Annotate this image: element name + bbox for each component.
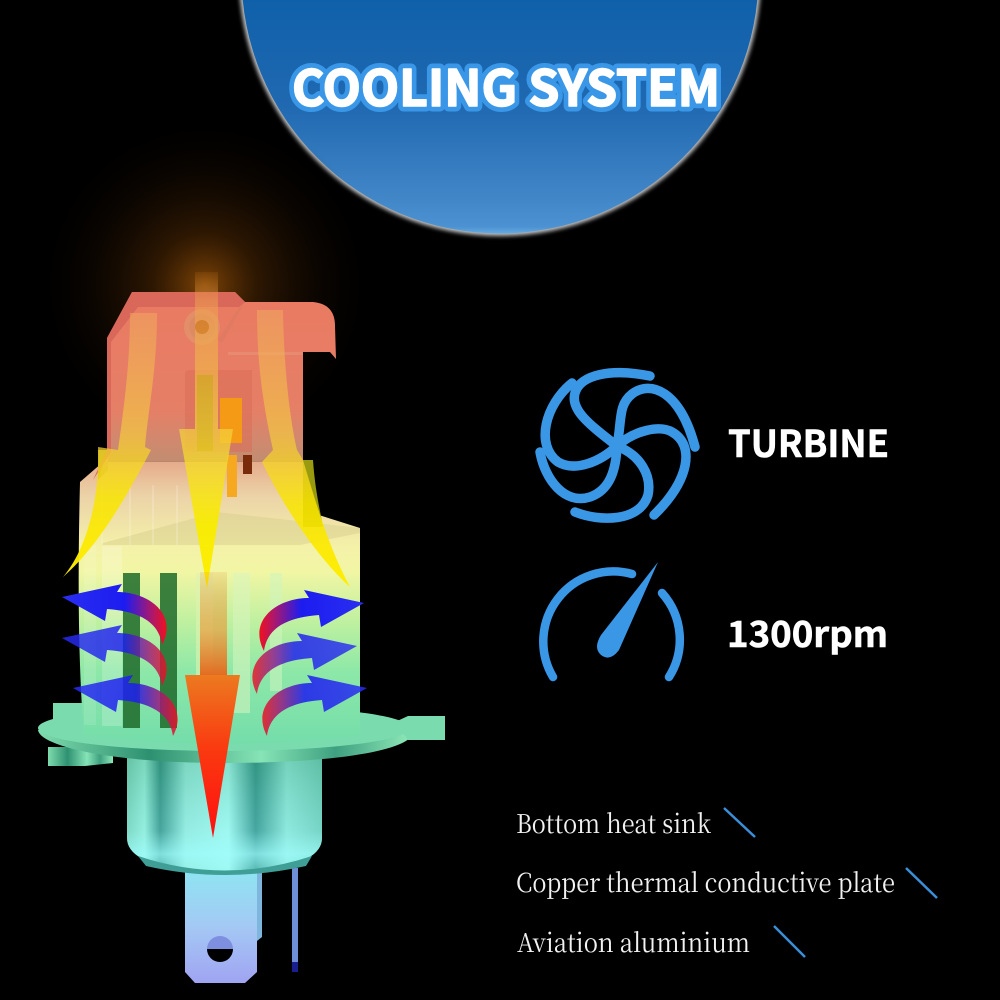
bulb heat sink body bbox=[79, 450, 360, 744]
label: 1300rpm: 1300rpm bbox=[727, 606, 888, 658]
arrows: left blue-red cooling airflow bbox=[62, 584, 178, 736]
bulb spade terminal bbox=[185, 868, 298, 983]
label: aviation aluminium: Aviation aluminium bbox=[517, 923, 750, 960]
panel: blue dome header bbox=[239, 0, 761, 236]
title: COOLING SYSTEM bbox=[292, 49, 720, 121]
arrows: right blue-red cooling airflow bbox=[252, 590, 367, 736]
bulb flange bbox=[38, 703, 445, 766]
label: bottom heat sink: Bottom heat sink bbox=[516, 804, 711, 841]
arrow: central red heat arrow bbox=[185, 572, 240, 838]
label: copper thermal conductive plate: Copper thermal conductive plate bbox=[516, 863, 895, 900]
bulb metal base cylinder bbox=[127, 755, 322, 875]
label: turbine: TURBINE bbox=[728, 414, 889, 468]
icon: turbine fan bbox=[540, 373, 695, 518]
icon: speedometer gauge bbox=[543, 562, 680, 677]
bulb red top bracket bbox=[93, 292, 336, 497]
arrows: yellow heat flow bbox=[63, 272, 350, 588]
heat glow behind bulb bbox=[30, 110, 380, 460]
illustration: H4 LED bulb with cooling airflow bbox=[30, 110, 445, 983]
title: COOLING SYSTEM bbox=[292, 49, 720, 121]
